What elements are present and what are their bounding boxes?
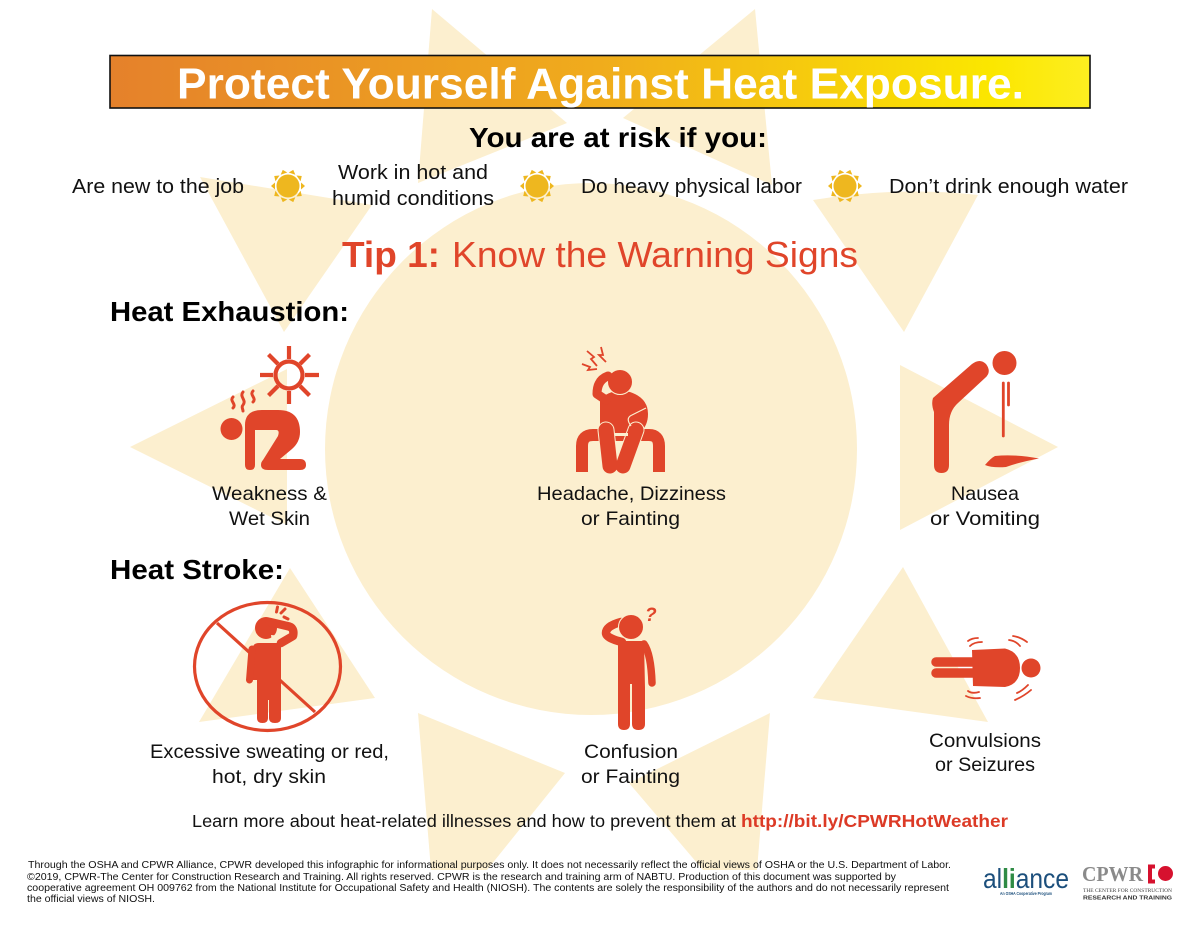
caption: or Seizures <box>935 754 1035 776</box>
caption <box>930 483 1040 530</box>
caption: or Fainting <box>581 766 680 788</box>
risk: not enough water: Don’t drink enough water <box>889 176 1128 198</box>
learn more line: http://bit.ly/CPWRHotWeather <box>741 811 1008 831</box>
footer disclaimer: ©2019, CPWR-The Center for Construction Research and Training. All rights reserved. CPWR is the research and training arm of NABTU. Production of this document was supported by <box>27 872 896 883</box>
caption <box>150 741 389 788</box>
icon: small sun 3 <box>828 169 862 203</box>
panel: headache, dizziness <box>537 347 726 530</box>
logo: alliance: alliance <box>983 863 1069 894</box>
logo: CPWR <box>1082 862 1173 902</box>
heading: tip 1: Tip 1: <box>342 234 440 275</box>
title banner: Protect Yourself Against Heat Exposure. <box>177 60 1024 108</box>
background sun graphic <box>130 9 1058 870</box>
panel: excessive sweating <box>150 602 389 788</box>
icon: no sweating person <box>194 602 340 730</box>
panel: confusion <box>581 605 680 788</box>
risk: heavy labor: Do heavy physical labor <box>581 176 802 198</box>
caption <box>212 483 327 530</box>
caption: Excessive sweating or red, <box>150 741 389 763</box>
logo: CPWR: RESEARCH AND TRAINING <box>1083 896 1172 902</box>
heading: heat exhaustion: Heat Exhaustion: <box>110 296 349 327</box>
icon: small sun 2 <box>520 169 554 203</box>
footer disclaimer: cooperative agreement OH 009762 from the National Institute for Occupational Safety and Health (NIOSH). The contents are solely the responsibility of the authors and do not necessarily represent <box>27 883 949 894</box>
icon: person convulsing <box>936 636 1040 700</box>
footer disclaimer: Through the OSHA and CPWR Alliance, CPWR developed this infographic for informational purposes only. It does not necessarily reflect the official views of OSHA or the U.S. Department of Labor. <box>28 860 951 871</box>
heading: tip 1: Know the Warning Signs <box>452 234 858 275</box>
logo: CPWR: CPWR <box>1082 862 1144 886</box>
risk factors row <box>72 162 1128 210</box>
icon: person vomiting <box>932 351 1039 473</box>
footer disclaimer <box>27 860 951 905</box>
panel: nausea, vomiting <box>930 351 1040 530</box>
caption: or Fainting <box>581 508 680 530</box>
footer disclaimer: the official views of NIOSH. <box>27 894 155 905</box>
caption: Headache, Dizziness <box>537 483 726 505</box>
caption: Wet Skin <box>229 508 310 530</box>
logo: CPWR: THE CENTER FOR CONSTRUCTION <box>1083 889 1173 894</box>
icon: confused person <box>606 605 657 730</box>
caption <box>537 483 726 530</box>
caption: hot, dry skin <box>212 766 326 788</box>
heading: you are at risk: You are at risk if you: <box>469 122 767 153</box>
risk: hot and humid <box>332 162 494 210</box>
icon: small sun 1 <box>271 169 305 203</box>
caption <box>581 741 680 788</box>
icon: seated person holding head <box>582 347 659 472</box>
logo: alliance: An OSHA Cooperative Program <box>1000 891 1052 896</box>
risk: hot and humid: humid conditions <box>332 188 494 210</box>
learn more line <box>192 811 1008 831</box>
caption: or Vomiting <box>930 508 1040 530</box>
panel: convulsions <box>929 636 1041 776</box>
caption: Confusion <box>584 741 678 763</box>
caption <box>929 730 1041 776</box>
icon: confused person: ? <box>645 605 657 626</box>
caption: Weakness & <box>212 483 327 505</box>
risk: hot and humid: Work in hot and <box>338 162 488 184</box>
heading: heat stroke: Heat Stroke: <box>110 554 284 585</box>
risk: new to the job: Are new to the job <box>72 176 244 198</box>
learn more line: Learn more about heat-related illnesses and how to prevent them at <box>192 811 736 831</box>
caption: Nausea <box>951 483 1019 505</box>
caption: Convulsions <box>929 730 1041 752</box>
icon: sun over bent person <box>220 346 319 470</box>
panel: weakness and wet skin <box>212 346 327 530</box>
